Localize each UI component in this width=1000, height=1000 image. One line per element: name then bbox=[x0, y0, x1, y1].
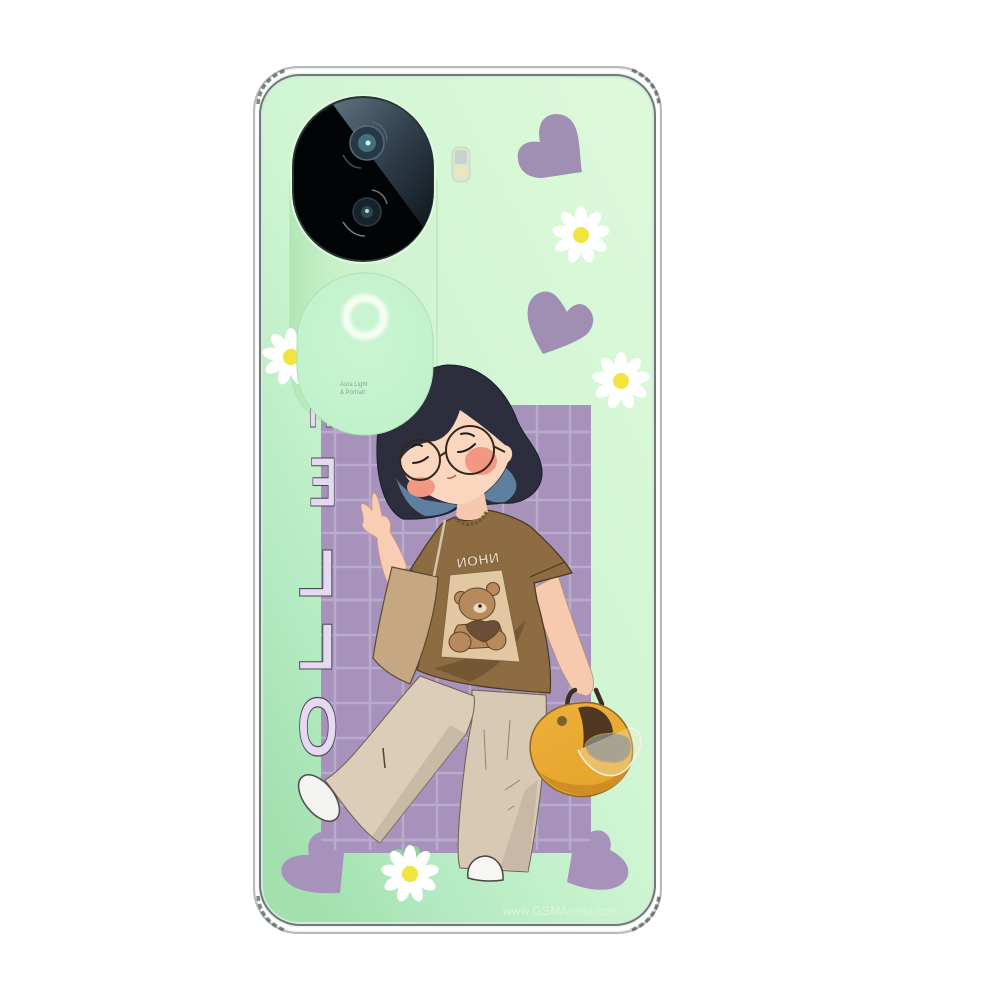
pill small print: Aura Light bbox=[340, 382, 368, 388]
daisy: left, behind pill bbox=[261, 328, 321, 386]
raised arm and hand bbox=[361, 493, 407, 584]
letter E: E bbox=[309, 444, 337, 522]
glasses bbox=[400, 426, 505, 480]
pill small print: & Portrait bbox=[340, 390, 365, 396]
purple grid panel bbox=[281, 405, 628, 893]
letter H: H bbox=[308, 375, 334, 440]
grid lines bbox=[321, 405, 591, 850]
camera module strip bbox=[290, 180, 437, 425]
shirt lettering: ИОНИ bbox=[456, 549, 500, 571]
helmet bag bbox=[530, 690, 641, 797]
cheek: left bbox=[407, 477, 435, 497]
shirt print bbox=[441, 549, 520, 662]
daisy: top bbox=[551, 206, 611, 264]
blue hair tips bbox=[396, 468, 516, 516]
closed eyes bbox=[412, 433, 475, 463]
face bbox=[400, 410, 512, 504]
glass reflection bbox=[333, 98, 433, 226]
flash module bbox=[452, 147, 470, 182]
handle bbox=[567, 690, 602, 707]
t-shirt bbox=[410, 510, 572, 693]
camera island bbox=[290, 94, 440, 265]
cheek: right bbox=[465, 447, 497, 475]
neck bbox=[456, 492, 488, 520]
phone back panel bbox=[263, 78, 652, 922]
flash pill bbox=[297, 273, 433, 435]
letter L: L bbox=[298, 610, 336, 683]
mirrored vertical lettering bbox=[297, 375, 338, 773]
pill small print bbox=[340, 382, 368, 396]
clear case shell bbox=[254, 67, 661, 933]
shoulder bag bbox=[373, 520, 445, 684]
right shoe bbox=[468, 856, 503, 881]
case corner reflections bbox=[258, 70, 659, 930]
watermark: www.GSMArena.com bbox=[502, 904, 620, 918]
teddy bear bbox=[449, 582, 506, 652]
daisy: bottom bbox=[380, 845, 440, 903]
light ring bbox=[346, 298, 384, 336]
heart: middle bbox=[528, 292, 593, 354]
right arm bbox=[530, 575, 593, 696]
sleeve cuff bbox=[530, 562, 565, 577]
necklace bbox=[455, 511, 487, 524]
shirt shading bbox=[434, 620, 525, 682]
visor bbox=[585, 734, 631, 762]
left leg trousers bbox=[325, 676, 474, 843]
letter L: L bbox=[298, 535, 336, 610]
lower lens bbox=[343, 190, 387, 236]
right leg trousers bbox=[458, 690, 546, 872]
phone case illustration bbox=[253, 66, 662, 934]
letter O: O bbox=[297, 681, 338, 773]
heart: top bbox=[518, 114, 582, 178]
hair bbox=[377, 365, 542, 519]
mouth bbox=[447, 475, 456, 478]
daisy: right bbox=[591, 352, 651, 410]
left shoe bbox=[291, 767, 347, 829]
girl figure bbox=[291, 365, 641, 881]
upper lens bbox=[343, 122, 387, 168]
